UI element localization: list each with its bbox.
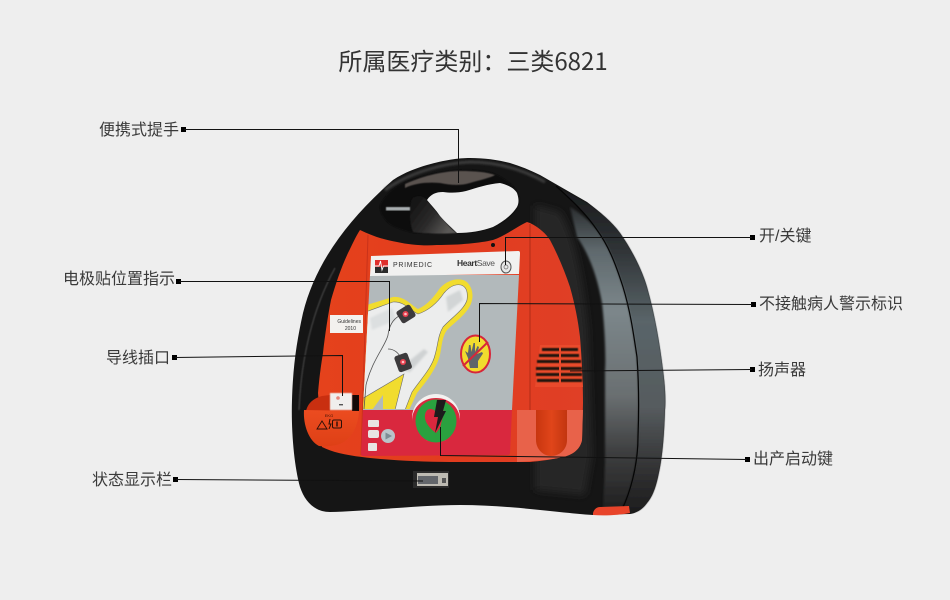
EKG connector [330, 393, 352, 410]
outer side band [556, 186, 665, 513]
white body [360, 285, 467, 410]
lower right light panel [517, 410, 583, 462]
lower electrode pad [394, 352, 413, 373]
panel fold line [361, 235, 368, 455]
power button [501, 261, 511, 273]
panel column divider [529, 224, 531, 410]
callout: 电极贴位置指示 [63, 270, 390, 331]
instruction panel [360, 251, 520, 410]
lightning bolt [434, 400, 446, 433]
callout: 导线插口 [106, 349, 342, 396]
shock button [412, 394, 460, 442]
electrode wires [364, 316, 402, 409]
head shading [446, 290, 463, 312]
torso shading [404, 349, 428, 372]
guidelines sticker: 2010 [345, 326, 356, 332]
EKG pocket [304, 393, 359, 446]
callout: 开/关键 [506, 227, 811, 265]
callout: 便携式提手 [99, 121, 458, 183]
handle hole [427, 183, 518, 233]
front red panel [318, 222, 583, 462]
callout: 扬声器: 扬声器 [758, 361, 806, 379]
light side band [570, 207, 639, 513]
callout: 扬声器 [570, 361, 806, 379]
neck shading [370, 309, 395, 329]
control icons [368, 420, 395, 451]
no touch warning icon [461, 336, 490, 372]
left grip [410, 196, 457, 234]
device shell silhouette [292, 158, 665, 515]
patient figure [360, 279, 473, 410]
inner grey shell [535, 205, 592, 495]
defibrillator device [292, 158, 665, 515]
callout: 不接触病人警示标识: 不接触病人警示标识 [759, 295, 903, 313]
callout: 出产启动键 [440, 427, 833, 468]
camera dot [491, 243, 495, 247]
callout: 出产启动键: 出产启动键 [753, 450, 833, 468]
grip highlight strip [386, 207, 410, 210]
callout: 导线插口: 导线插口 [106, 349, 170, 367]
callout: 开/关键: 开/关键 [759, 227, 811, 245]
pocket lip [306, 395, 330, 411]
primedic logo [375, 260, 432, 273]
status display [413, 471, 449, 488]
callout: 电极贴位置指示: 电极贴位置指示 [63, 270, 175, 288]
guidelines sticker: Guidelines [337, 319, 361, 325]
shell seam [556, 186, 639, 513]
handle grip band [405, 171, 495, 188]
header strip [370, 251, 520, 276]
yellow outline [360, 279, 473, 410]
heartsave logo: HeartSave [457, 258, 495, 268]
left shell gloss [299, 268, 335, 410]
callout: 状态显示栏: 状态显示栏 [92, 471, 172, 489]
guidelines sticker [330, 315, 363, 333]
bottom red latch [593, 506, 630, 515]
red control band [361, 410, 512, 456]
title: 所属医疗类别：三类6821 [338, 42, 608, 77]
heart symbol [425, 409, 444, 433]
upper electrode pad [396, 304, 416, 324]
primedic logo: PRIMEDIC [393, 262, 432, 269]
callout: 便携式提手: 便携式提手 [99, 121, 179, 139]
callout: 不接触病人警示标识 [480, 295, 903, 342]
leg gap [372, 395, 383, 409]
EKG warning icons: EKG [325, 413, 333, 418]
callout: 状态显示栏 [92, 471, 423, 489]
handle recess [380, 170, 520, 233]
carry scoop [536, 410, 567, 456]
speaker grille [535, 345, 583, 387]
handle rim highlight [385, 162, 545, 190]
